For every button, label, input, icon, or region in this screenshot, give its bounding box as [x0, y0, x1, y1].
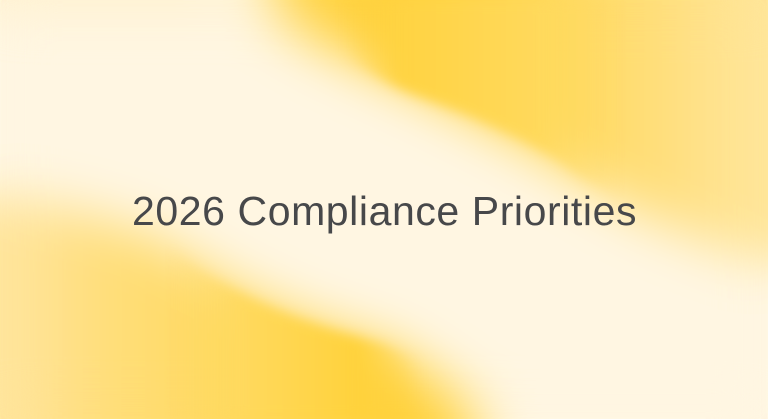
- title: 2026 Compliance Priorities: [132, 188, 637, 234]
